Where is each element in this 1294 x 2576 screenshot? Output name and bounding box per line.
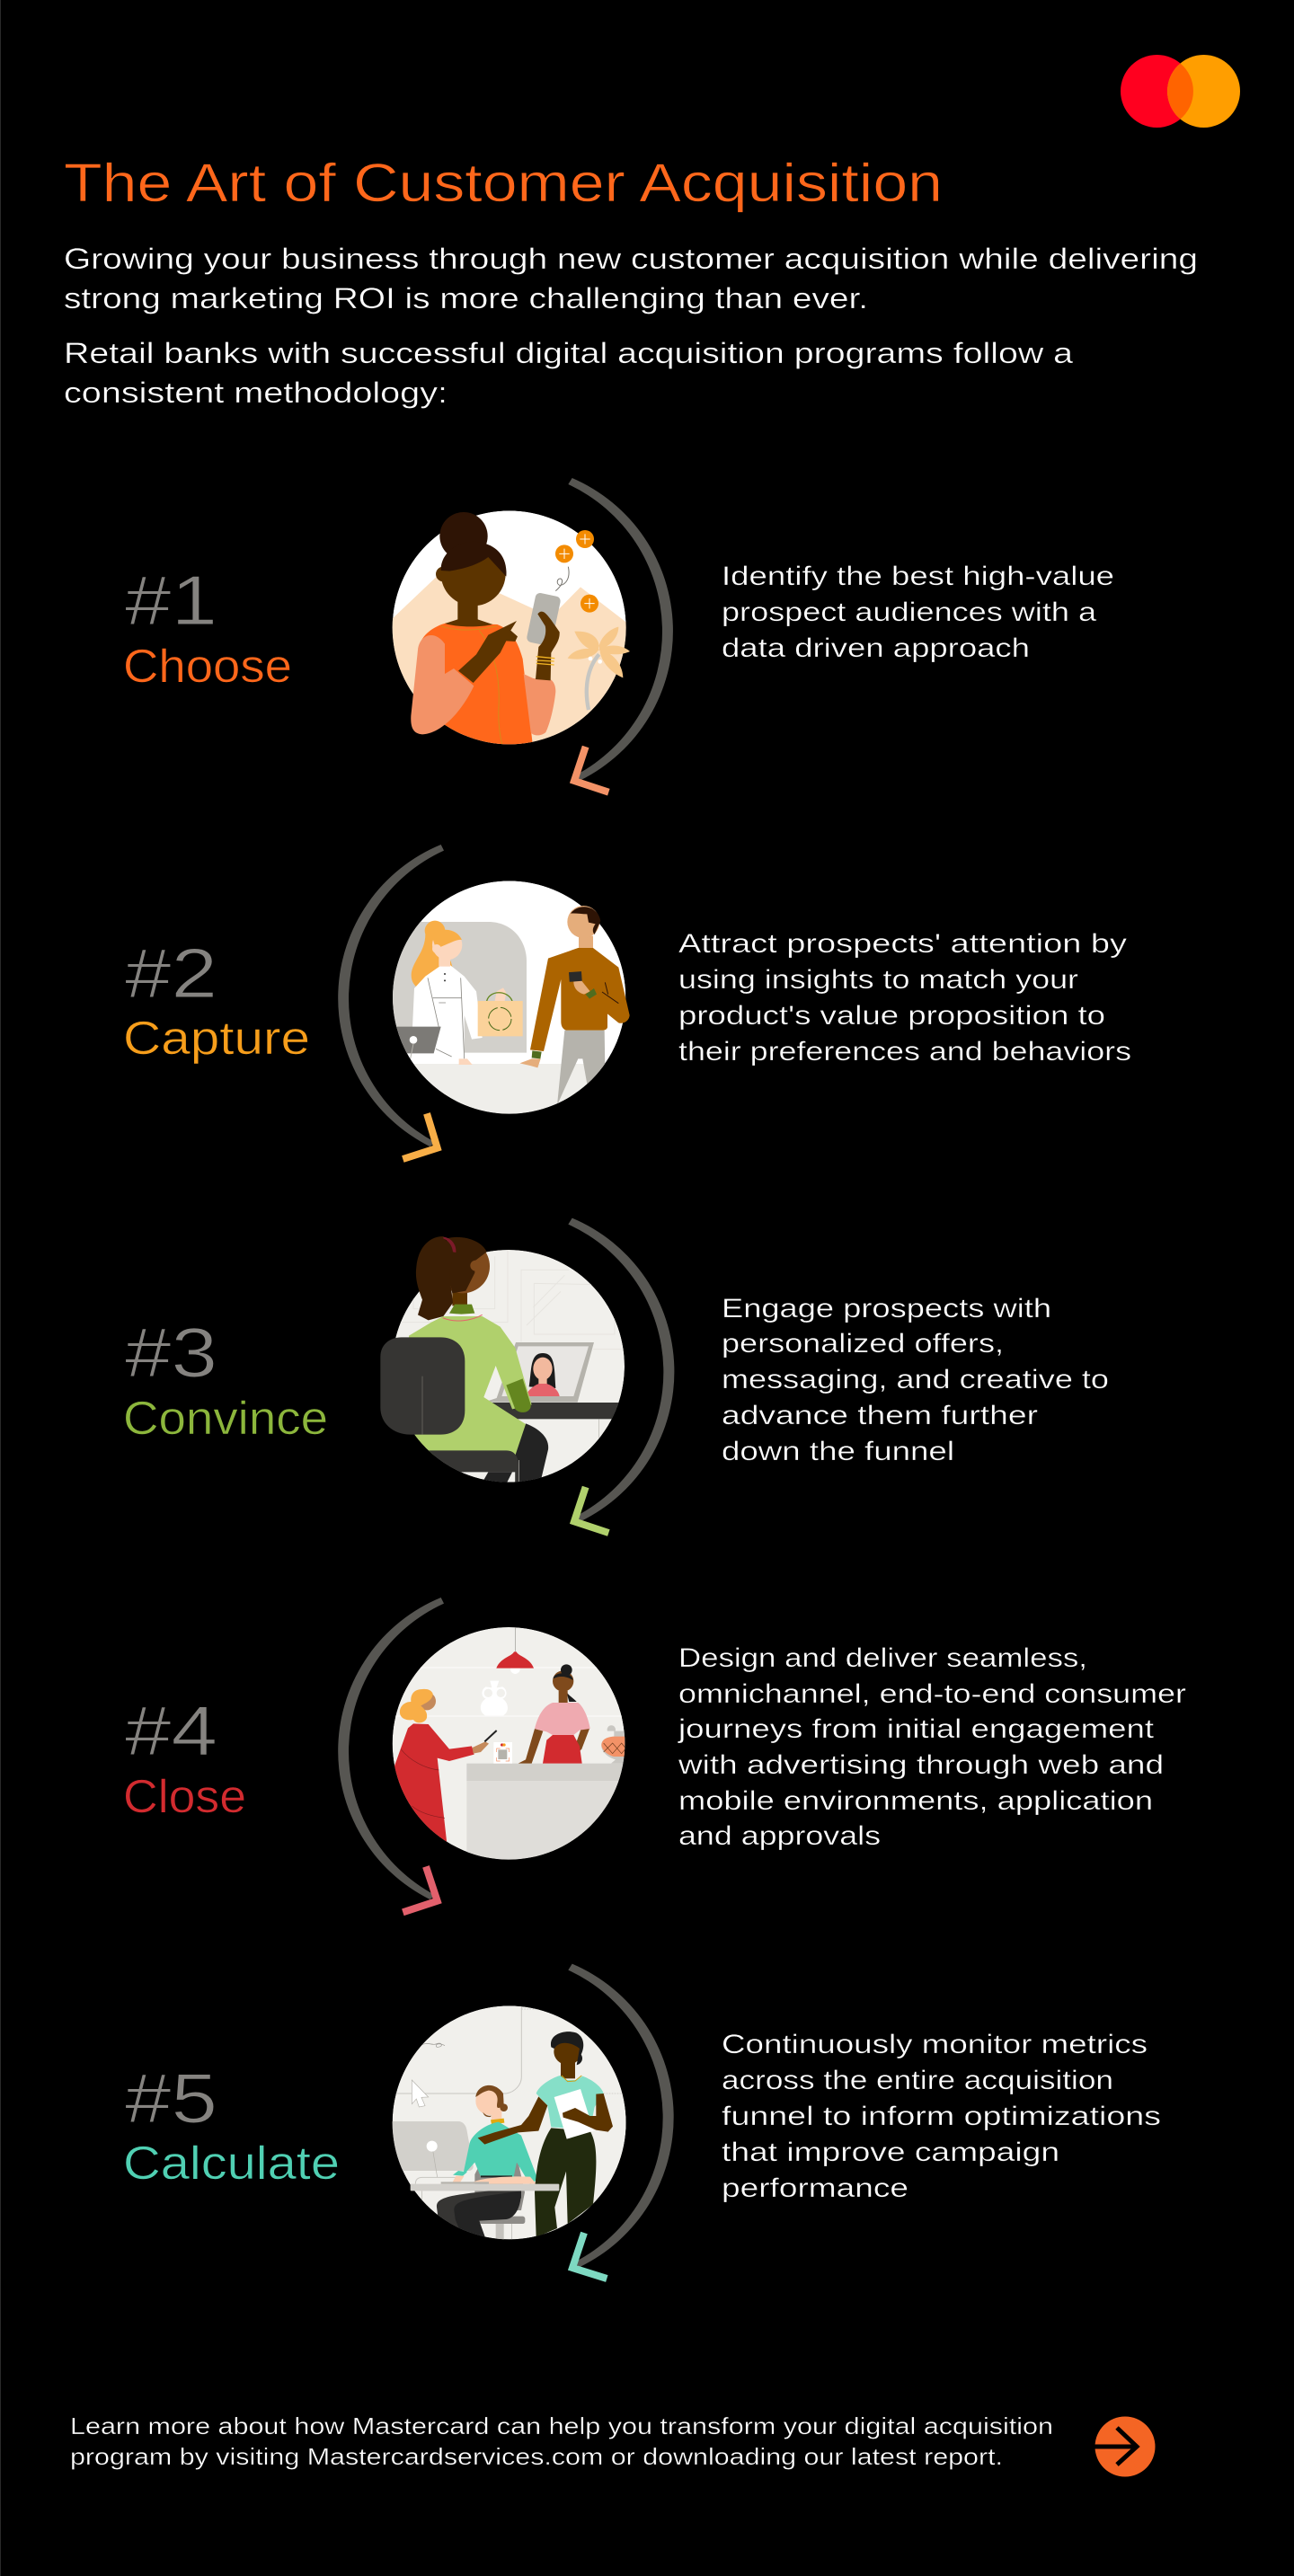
step 5 description: across the entire acquisition	[722, 2066, 1113, 2095]
panel: step 3 convince	[123, 1218, 1109, 1533]
step 3 description: Engage prospects with	[722, 1294, 1051, 1323]
step 1 description: data driven approach	[722, 633, 1030, 663]
woman with bag	[425, 921, 523, 1036]
step 1 description	[722, 562, 1114, 663]
intro text: strong marketing ROI is more challenging than ever.	[64, 282, 868, 314]
step 5 description: that improve campaign	[722, 2138, 1059, 2167]
man with phone	[519, 906, 630, 1067]
footer text: Learn more about how Mastercard can help you transform your digital acquisition	[70, 2412, 1053, 2439]
step 4 description: Design and deliver seamless,	[678, 1643, 1087, 1673]
step 3 description: personalized offers,	[722, 1329, 1004, 1359]
illustration: shop counter scene	[393, 881, 630, 1114]
illustration: woman with phone	[389, 510, 630, 748]
step 3 description	[722, 1294, 1109, 1466]
intro text: Growing your business through new customer acquisition while delivering	[64, 243, 1198, 275]
step 5 description	[722, 2030, 1161, 2203]
illustration: bank counter scene	[391, 1627, 629, 1864]
step 4 description: mobile environments, application	[678, 1786, 1153, 1816]
step 3 description: advance them further	[722, 1401, 1038, 1430]
step 3 description: down the funnel	[722, 1437, 954, 1466]
step 4 description	[678, 1643, 1186, 1851]
title: The Art of Customer Acquisition	[64, 153, 943, 213]
woman behind counter	[518, 1664, 590, 1764]
intro text	[64, 243, 1198, 409]
arrow: clockwise arc step 3	[568, 1218, 674, 1533]
cursor icon	[412, 2080, 429, 2107]
icon: orange arrow button	[1095, 2417, 1156, 2476]
woman with phone	[400, 1689, 512, 1764]
step number 5: #5	[125, 2058, 217, 2138]
step number 3: #3	[125, 1313, 217, 1392]
arrow: curved arc step 2	[338, 845, 444, 1159]
logo: Mastercard circles	[1121, 55, 1240, 128]
plus badges	[555, 530, 598, 613]
step 3 description: messaging, and creative to	[722, 1365, 1109, 1394]
step number 4: #4	[125, 1691, 217, 1770]
step 2 description: Attract prospects' attention by	[678, 929, 1127, 959]
step 5 description: funnel to inform optimizations	[722, 2102, 1161, 2131]
step 5 description: Continuously monitor metrics	[722, 2030, 1148, 2059]
intro text: consistent methodology:	[64, 376, 448, 409]
step 2 description	[678, 929, 1131, 1067]
standing woman	[478, 2032, 613, 2237]
footer text	[70, 2412, 1053, 2470]
step 1 description: Identify the best high-value	[722, 562, 1114, 591]
panel: step 1 choose	[123, 478, 1114, 792]
step 4 description: with advertising through web and	[678, 1750, 1164, 1780]
step 4 description: journeys from initial engagement	[678, 1714, 1155, 1744]
computer dot	[427, 2141, 438, 2152]
illustration: two colleagues at computer	[389, 2005, 626, 2242]
arrow: clockwise arc step 1	[568, 478, 673, 792]
step number 2: #2	[125, 934, 217, 1013]
desk and keyboard	[411, 2182, 559, 2191]
arrow: curved arc step 4	[338, 1598, 444, 1912]
step 1 description: prospect audiences with a	[722, 598, 1096, 627]
intro text: Retail banks with successful digital acquisition programs follow a	[64, 337, 1073, 369]
arrow: clockwise arc step 5	[568, 1964, 674, 2279]
woman figure	[411, 512, 562, 735]
step label calculate: Calculate	[123, 2138, 340, 2190]
step label capture: Capture	[123, 1013, 310, 1065]
step label convince: Convince	[123, 1393, 328, 1445]
footer text: program by visiting Mastercardservices.com or downloading our latest report.	[70, 2443, 1003, 2470]
step 2 description: product's value proposition to	[678, 1001, 1105, 1031]
seated woman	[452, 2085, 537, 2185]
step 5 description: performance	[722, 2173, 908, 2203]
step 4 description: and approvals	[678, 1821, 881, 1851]
panel: step 4 close	[123, 1598, 1186, 1912]
step label choose: Choose	[123, 641, 292, 693]
step 2 description: their preferences and behaviors	[678, 1037, 1131, 1067]
step 4 description: omnichannel, end-to-end consumer	[678, 1679, 1186, 1709]
step number 1: #1	[125, 561, 217, 640]
illustration: woman on video call	[380, 1236, 626, 1484]
step 2 description: using insights to match your	[678, 965, 1078, 995]
palm tree	[568, 627, 630, 710]
panel: step 2 capture	[123, 845, 1131, 1159]
panel: step 5 calculate	[123, 1964, 1161, 2279]
woman figure at desk	[380, 1236, 531, 1435]
step label close: Close	[123, 1771, 246, 1823]
